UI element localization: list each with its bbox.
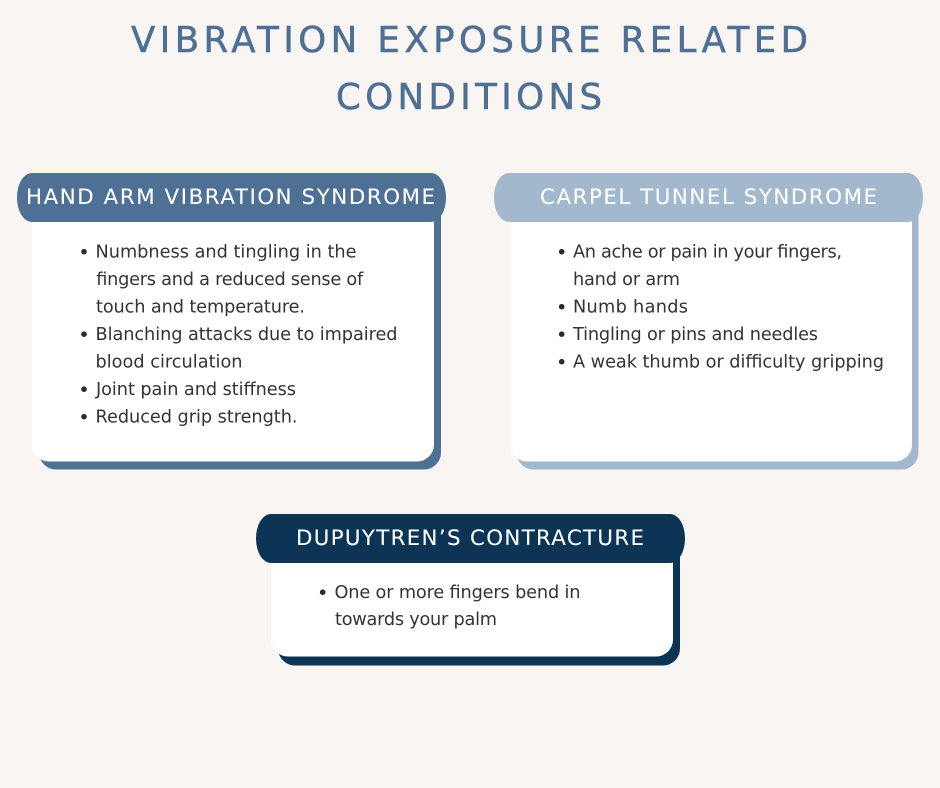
symptom list: One or more fingers bend in [334, 583, 580, 603]
title: CONDITIONS [336, 77, 602, 118]
card with offset shadow [32, 200, 441, 470]
heading: carpel tunnel syndrome: CARPEL TUNNEL SYNDROME [540, 185, 877, 210]
card with offset shadow [510, 200, 918, 470]
heading: dupuytren's contracture: DUPUYTREN’S CONTRACTURE [296, 526, 644, 551]
panel: dupuytren's contracture [256, 514, 685, 666]
symptom list: Numbness and tingling in the [96, 242, 356, 262]
heading: hand arm vibration syndrome: HAND ARM VIBRATION SYNDROME [26, 185, 435, 210]
symptom list [320, 583, 580, 630]
symptom list: blood circulation [96, 352, 242, 372]
title [131, 20, 808, 118]
symptom list: A weak thumb or difficulty gripping [573, 352, 884, 372]
symptom list: An ache or pain in your fingers, [573, 242, 842, 262]
heading: carpel tunnel syndrome [494, 173, 923, 222]
symptom list: Tingling or pins and needles [572, 325, 818, 345]
title: VIBRATION EXPOSURE RELATED [131, 20, 808, 61]
symptom list: Numb hands [573, 298, 688, 318]
panel: carpel tunnel syndrome [494, 173, 923, 470]
symptom list: Joint pain and stiffness [95, 380, 296, 400]
symptom list: fingers and a reduced sense of [96, 270, 364, 290]
symptom list [81, 242, 397, 428]
symptom list: hand or arm [573, 270, 680, 290]
heading: dupuytren's contracture [256, 514, 685, 563]
card with offset shadow [271, 540, 680, 666]
symptom list: Reduced grip strength. [96, 408, 298, 428]
symptom list: Blanching attacks due to impaired [96, 325, 398, 345]
heading: hand arm vibration syndrome [17, 173, 446, 222]
panel: hand arm vibration syndrome [17, 173, 446, 470]
symptom list [559, 242, 884, 372]
symptom list: touch and temperature. [96, 298, 305, 318]
symptom list: towards your palm [335, 610, 497, 630]
